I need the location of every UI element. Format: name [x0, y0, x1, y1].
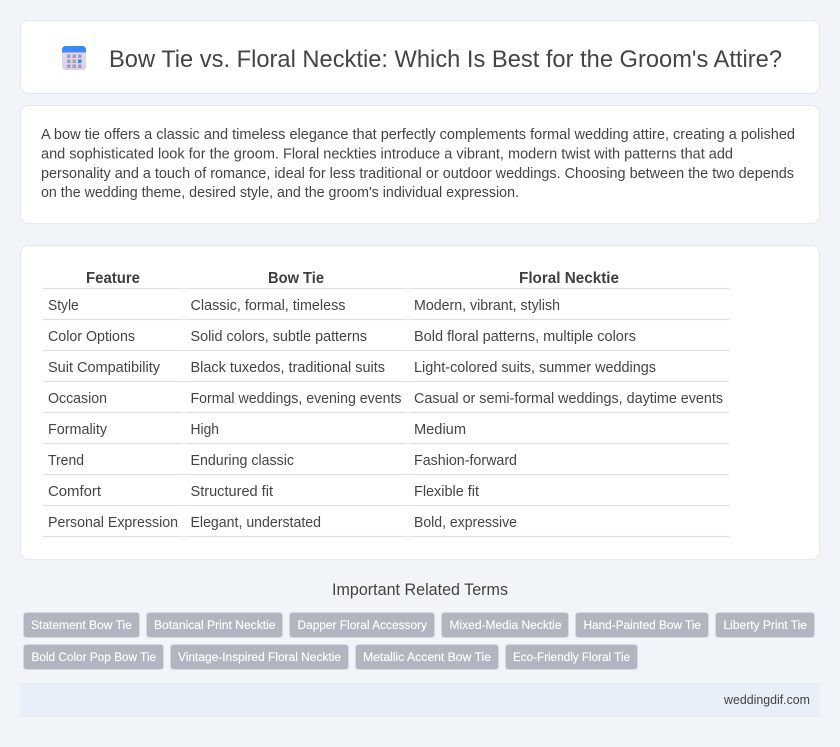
tag: Hand-Painted Bow Tie: [576, 612, 708, 638]
tag: Bold Color Pop Bow Tie: [24, 644, 164, 670]
table row: Suit Compatibility: [43, 360, 729, 382]
table row: Color Options: Bold floral patterns, multiple colors: [414, 329, 636, 345]
table row: Suit Compatibility: Black tuxedos, traditional suits: [190, 360, 385, 376]
table row: Trend: Fashion-forward: [414, 453, 517, 469]
table row: Style: [43, 298, 729, 320]
table header row: Floral Necktie: [519, 270, 619, 287]
table row: Comfort: Comfort: [48, 484, 101, 500]
table row: Personal Expression: Elegant, understated: [190, 515, 321, 531]
table row: Personal Expression: [43, 515, 729, 536]
tag: Statement Bow Tie: [24, 612, 140, 638]
table row: Occasion: Formal weddings, evening events: [190, 391, 402, 407]
table row: Comfort: Structured fit: [190, 484, 273, 500]
table header row: [43, 270, 729, 288]
text block: introduction paragraph: [41, 127, 795, 201]
tag: Mixed-Media Necktie: Mixed-Media Necktie: [450, 618, 562, 632]
tag: Dapper Floral Accessory: Dapper Floral Accessory: [298, 618, 428, 632]
tag: Dapper Floral Accessory: [290, 612, 434, 638]
panel: comparison table: [20, 246, 820, 560]
tag: Metallic Accent Bow Tie: Metallic Accent Bow Tie: [363, 650, 491, 664]
table row: Style: Style: [48, 298, 79, 314]
table row: Formality: Formality: [48, 422, 108, 438]
table row: Color Options: Solid colors, subtle patterns: [190, 329, 367, 345]
table row: Comfort: [43, 484, 729, 506]
table row: Personal Expression: Personal Expression: [48, 515, 178, 531]
table row: Suit Compatibility: Suit Compatibility: [48, 360, 161, 376]
table row: Personal Expression: Bold, expressive: [414, 515, 517, 531]
icon: calendar: [62, 46, 86, 70]
table row: Trend: Trend: [48, 453, 84, 469]
panel: header: [20, 20, 820, 94]
table row: Comfort: Flexible fit: [414, 484, 479, 500]
tag: Metallic Accent Bow Tie: [356, 644, 498, 670]
text block: introduction paragraph: on the wedding theme, desired style, and the groom's individual expression.: [41, 185, 519, 201]
tag: Botanical Print Necktie: [146, 612, 282, 638]
table row: Occasion: Occasion: [48, 391, 107, 407]
text block: introduction paragraph: personality and a touch of romance, ideal for less traditional or outdoor weddings. Choosing between the two depends: [41, 166, 794, 182]
tag: Vintage-Inspired Floral Necktie: Vintage-Inspired Floral Necktie: [178, 650, 341, 664]
table row: Occasion: [43, 391, 729, 412]
table row: Suit Compatibility: Light-colored suits, summer weddings: [414, 360, 656, 376]
title: Bow Tie vs. Floral Necktie: Which Is Best for the Groom's Attire?: [109, 46, 782, 73]
related term tags: [24, 612, 814, 670]
table row: Trend: [43, 453, 729, 474]
tag: Botanical Print Necktie: Botanical Print Necktie: [154, 618, 276, 632]
heading: related terms: Important Related Terms: [332, 581, 508, 599]
panel: introduction: [20, 106, 820, 224]
tag: Hand-Painted Bow Tie: Hand-Painted Bow Tie: [584, 618, 701, 632]
table row: Formality: Medium: [414, 422, 466, 438]
table row: Occasion: Casual or semi-formal weddings, daytime events: [414, 391, 723, 407]
tag: Vintage-Inspired Floral Necktie: [170, 644, 348, 670]
footer site name: weddingdif.com: [723, 693, 810, 707]
tag: Liberty Print Tie: [716, 612, 814, 638]
tag: Statement Bow Tie: Statement Bow Tie: [31, 618, 132, 632]
table row: Trend: Enduring classic: [190, 453, 294, 469]
text block: introduction paragraph: A bow tie offers a classic and timeless elegance that perfectly complements formal wedding attire, creating a polished: [41, 127, 795, 143]
table row: Style: Classic, formal, timeless: [190, 298, 346, 314]
table row: Formality: [43, 422, 729, 444]
footer: [20, 683, 820, 717]
tag: Mixed-Media Necktie: [442, 612, 568, 638]
table row: Color Options: [43, 329, 729, 350]
table row: Color Options: Color Options: [48, 329, 135, 345]
table header row: Feature: [86, 270, 140, 287]
text block: introduction paragraph: and sophisticated look for the groom. Floral neckties introduce a vibrant, modern twist with patterns that add: [41, 146, 733, 162]
table row: Style: Modern, vibrant, stylish: [414, 298, 560, 314]
tag: Bold Color Pop Bow Tie: Bold Color Pop Bow Tie: [32, 650, 156, 664]
tag: Eco-Friendly Floral Tie: Eco-Friendly Floral Tie: [513, 650, 630, 664]
tag: Eco-Friendly Floral Tie: [506, 644, 638, 670]
table header row: Bow Tie: [268, 270, 324, 287]
table row: Formality: High: [190, 422, 219, 438]
tag: Liberty Print Tie: Liberty Print Tie: [724, 618, 807, 632]
